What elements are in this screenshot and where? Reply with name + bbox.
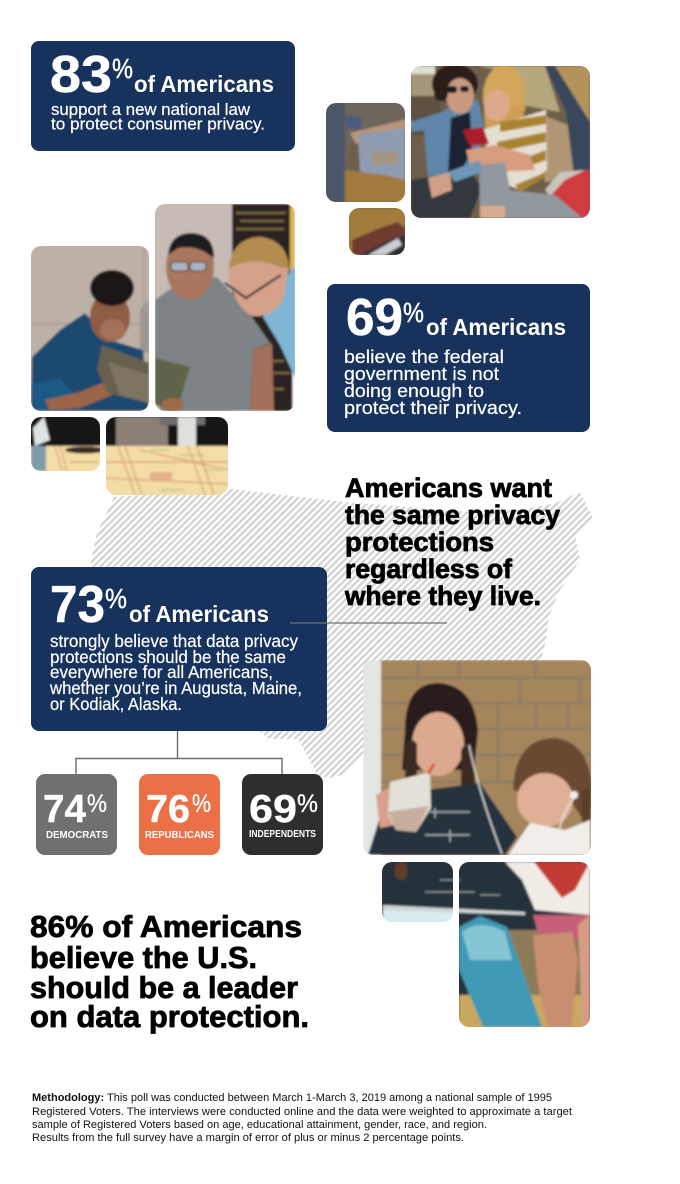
stat box: 73%: 73: [50, 576, 105, 634]
methodology note: Registered Voters. The interviews were conducted online and the data were weighted to approximate a target: [32, 1106, 572, 1118]
methodology note: Results from the full survey have a margin of error of plus or minus 2 percentage points.: [32, 1132, 464, 1144]
tile: Democrats 74%: [36, 774, 117, 855]
methodology note: Methodology: This poll was conducted between March 1-March 3, 2019 among a national sample of 1995: [32, 1092, 552, 1104]
stat box: 69%: doing enough to: [344, 380, 484, 401]
stat box: 83%: to protect consumer privacy.: [51, 116, 265, 134]
tile: Democrats 74%: %: [87, 790, 107, 818]
tile: Independents 69%: %: [297, 790, 318, 818]
tile: Republicans 76%: [139, 774, 220, 855]
heading: same privacy protections: Americans want: [345, 473, 552, 503]
photo: colleagues looking at tablets over a map table: [25, 200, 296, 498]
stat box: 83%: of Americans: [134, 71, 274, 97]
heading: 86% of Americans: on data protection.: [30, 999, 309, 1034]
stat box: 73%: strongly believe that data privacy: [50, 631, 298, 651]
stat box: 73%: of Americans: [129, 601, 269, 627]
heading: 86% of Americans: should be a leader: [30, 970, 298, 1005]
stat box: 69%: [327, 284, 590, 432]
tile: Republicans 76%: %: [192, 790, 211, 818]
tile: Independents 69%: INDEPENDENTS: [249, 828, 316, 840]
stat box: 83%: 83: [50, 46, 112, 104]
stat box: 69%: %: [403, 297, 424, 328]
heading: same privacy protections: regardless of: [345, 554, 513, 584]
stat box: 69%: of Americans: [426, 314, 566, 340]
heading: same privacy protections: where they live.: [344, 581, 541, 611]
tile: Democrats 74%: DEMOCRATS: [46, 829, 108, 841]
heading: same privacy protections: [344, 473, 560, 611]
tile: Democrats 74%: 74: [43, 788, 86, 831]
tile: Independents 69%: [242, 774, 323, 855]
stat box: 73%: or Kodiak, Alaska.: [50, 694, 182, 714]
stat box: 73%: everywhere for all Americans,: [50, 662, 273, 682]
heading: 86% of Americans: believe the U.S.: [30, 940, 257, 975]
photo: friends with phone in a vehicle: [326, 66, 590, 255]
connector from stat box to party tiles: [76, 731, 282, 774]
stat box: 83%: %: [112, 53, 133, 84]
leader line from heading to stat box: [290, 622, 447, 624]
heading: 86% of Americans: [30, 909, 309, 1034]
photo: two girls listening with earbuds: [363, 660, 595, 1030]
tile: Republicans 76%: 76: [146, 788, 190, 831]
methodology note: sample of Registered Voters based on age, educational attainment, gender, race, and region.: [32, 1119, 487, 1131]
stat box: 73%: %: [105, 583, 127, 614]
heading: 86% of Americans: 86% of Americans: [30, 909, 302, 944]
heading: same privacy protections: the same privacy: [345, 500, 560, 530]
map: hatched United States silhouette: [90, 489, 593, 778]
stat box: 69%: believe the federal: [344, 346, 504, 367]
stat box: 83%: [31, 41, 295, 151]
stat box: 73%: protections should be the same: [50, 647, 286, 667]
tile: Independents 69%: 69: [249, 788, 297, 831]
tile: Republicans 76%: REPUBLICANS: [145, 829, 214, 841]
stat box: 69%: protect their privacy.: [344, 397, 522, 418]
stat box: 83%: support a new national law: [51, 101, 250, 119]
stat box: 73%: whether you’re in Augusta, Maine,: [49, 678, 302, 698]
stat box: 69%: 69: [346, 289, 403, 347]
heading: same privacy protections: protections: [345, 527, 494, 557]
stat box: 73%: [31, 567, 327, 731]
stat box: 69%: government is not: [344, 363, 499, 384]
methodology note: [32, 1092, 572, 1144]
